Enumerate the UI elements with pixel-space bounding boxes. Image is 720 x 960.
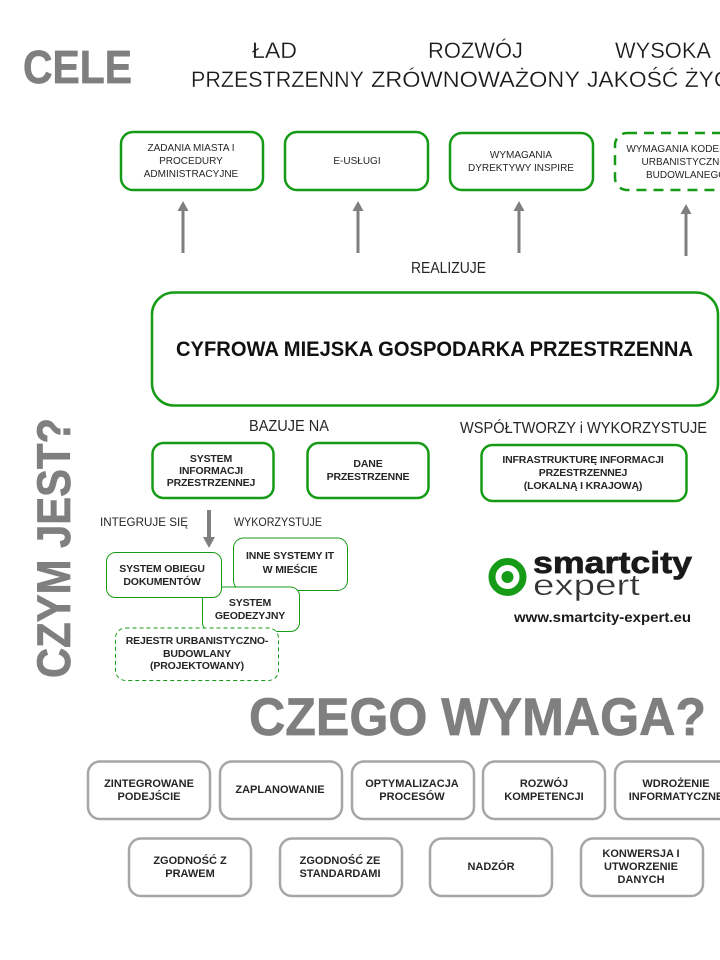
label: wykorzystuje: WYKORZYSTUJE: [234, 515, 322, 529]
box: system informacji przestrzennej: PRZESTRZENNEJ: [167, 477, 256, 489]
label: bazuje na: BAZUJE NA: [249, 418, 329, 435]
box: rozwój kompetencji: ROZWÓJ: [520, 777, 568, 790]
arrow 4: [680, 204, 692, 256]
box: system informacji przestrzennej: SYSTEM: [190, 453, 233, 465]
box: nadzór: [430, 838, 552, 896]
box: zadania miasta: [121, 132, 263, 190]
box: zgodność z prawem: ZGODNOŚĆ Z: [153, 854, 227, 867]
box: inne systemy it: W MIEŚCIE: [263, 563, 317, 576]
box: system obiegu dokumentów: [106, 552, 222, 598]
panel: cyfrowa miejska gospodarka przestrzenna: [152, 292, 718, 406]
panel: cyfrowa miejska gospodarka przestrzenna: CYFROWA MIEJSKA GOSPODARKA PRZESTRZENNA: [176, 338, 693, 361]
box: zadania miasta: ADMINISTRACYJNE: [144, 169, 239, 180]
goal: rozwój zrównoważony: ZRÓWNOWAŻONY: [371, 67, 580, 92]
box: konwersja i utworzenie danych: KONWERSJA I: [602, 848, 680, 860]
arrow 3: [514, 201, 524, 253]
box: zadania miasta: PROCEDURY: [159, 156, 223, 167]
box: infrastruktura informacji: (LOKALNĄ I KRAJOWĄ): [524, 480, 642, 492]
box: wymagania inspire: WYMAGANIA: [490, 150, 552, 161]
box: rozwój kompetencji: [483, 762, 605, 819]
box: system obiegu dokumentów: DOKUMENTÓW: [123, 575, 201, 588]
heading: cele: CELE: [23, 41, 132, 93]
box: system obiegu dokumentów: SYSTEM OBIEGU: [119, 563, 205, 575]
logo: smartcity expert: smartcity: [533, 545, 693, 580]
box: rozwój kompetencji: KOMPETENCJI: [504, 791, 584, 803]
box: nadzór: NADZÓR: [467, 860, 515, 873]
box: system informacji przestrzennej: [152, 443, 274, 498]
box: wymagania inspire: DYREKTYWY INSPIRE: [468, 163, 574, 174]
box: zintegrowane podejście: PODEJŚCIE: [118, 790, 180, 803]
box: zintegrowane podejście: [88, 762, 210, 819]
box: dane przestrzenne: [308, 443, 428, 498]
goal: wysoka jakość życia: WYSOKA: [615, 38, 711, 63]
box: e-usługi: E-USŁUGI: [333, 156, 381, 167]
box: optymalizacja procesów: PROCESÓW: [379, 790, 445, 803]
logo: smartcity expert: expert: [533, 569, 641, 602]
box: zintegrowane podejście: ZINTEGROWANE: [104, 778, 194, 790]
box: zgodność z prawem: PRAWEM: [165, 868, 215, 880]
box: infrastruktura informacji: [482, 445, 686, 501]
box: rejestr urbanistyczno-budowlany (dashed): (PROJEKTOWANY): [150, 660, 244, 672]
box: wymagania kodeksu (dashed): [615, 133, 720, 190]
box: konwersja i utworzenie danych: UTWORZENIE: [604, 861, 678, 873]
goal: ład przestrzenny: [191, 38, 364, 92]
box: wdrożenie informatyczne: [615, 762, 720, 819]
box: wymagania inspire: [450, 133, 593, 190]
logo url: www.smartcity-expert.eu: [513, 609, 691, 625]
goal: ład przestrzenny: PRZESTRZENNY: [191, 67, 364, 92]
box: rejestr urbanistyczno-budowlany (dashed): [116, 628, 278, 680]
box: wdrożenie informatyczne: WDROŻENIE: [642, 777, 710, 790]
logo: smartcity expert: [492, 545, 693, 602]
heading: czego wymaga: CZEGO WYMAGA?: [249, 688, 706, 747]
box: inne systemy it: INNE SYSTEMY IT: [246, 550, 335, 562]
box: zaplanowanie: ZAPLANOWANIE: [235, 784, 325, 796]
box: system geodezyjny: SYSTEM: [229, 597, 272, 609]
goal: rozwój zrównoważony: [371, 38, 580, 92]
box: zgodność ze standardami: STANDARDAMI: [299, 868, 381, 880]
box: zadania miasta: ZADANIA MIASTA I: [147, 143, 235, 154]
box: dane przestrzenne: DANE: [353, 458, 383, 470]
box: inne systemy it: [234, 538, 348, 590]
box: e-usługi: [285, 132, 428, 190]
box: zgodność z prawem: [129, 838, 251, 896]
box: rejestr urbanistyczno-budowlany (dashed): BUDOWLANY: [163, 648, 231, 660]
heading: czym jest: CZYM JEST?: [27, 418, 80, 678]
arrow 2: [352, 201, 364, 253]
arrow 1: [178, 201, 188, 253]
box: dane przestrzenne: PRZESTRZENNE: [327, 471, 410, 483]
box: konwersja i utworzenie danych: DANYCH: [617, 874, 665, 886]
goal: wysoka jakość życia: [587, 38, 720, 92]
label: realizuje: REALIZUJE: [411, 260, 486, 277]
goal: rozwój zrównoważony: ROZWÓJ: [428, 38, 523, 63]
goal: ład przestrzenny: ŁAD: [252, 38, 297, 63]
box: system geodezyjny: GEODEZYJNY: [215, 610, 285, 622]
box: infrastruktura informacji: PRZESTRZENNEJ: [539, 467, 628, 479]
box: system informacji przestrzennej: INFORMACJI: [179, 465, 243, 477]
box: system geodezyjny: [202, 587, 300, 632]
box: rejestr urbanistyczno-budowlany (dashed): REJESTR URBANISTYCZNO-: [126, 635, 269, 647]
box: infrastruktura informacji: INFRASTRUKTURĘ INFORMACJI: [502, 454, 664, 466]
box: zgodność ze standardami: ZGODNOŚĆ ZE: [300, 854, 380, 867]
box: optymalizacja procesów: [352, 762, 474, 819]
box: optymalizacja procesów: OPTYMALIZACJA: [365, 778, 459, 790]
box: zgodność ze standardami: [280, 838, 402, 896]
arrow: down: [203, 510, 215, 548]
box: zaplanowanie: [220, 762, 342, 819]
box: konwersja i utworzenie danych: [581, 838, 703, 896]
label: integruje się: INTEGRUJE SIĘ: [100, 515, 188, 529]
